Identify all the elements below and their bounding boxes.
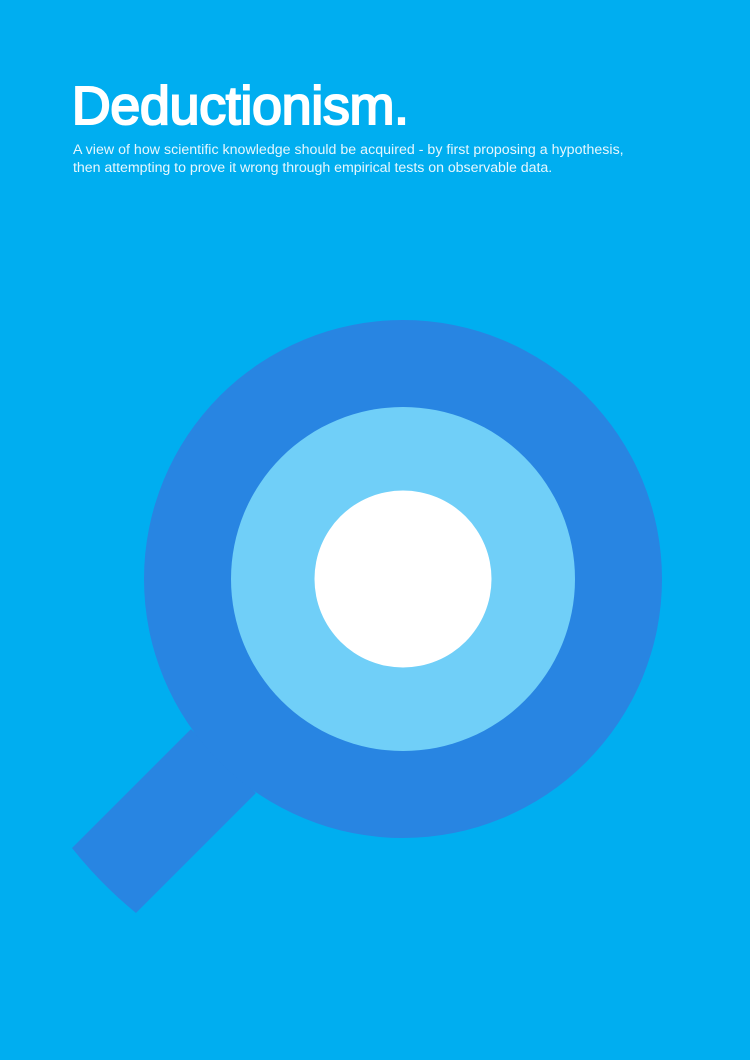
description text: then attempting to prove it wrong through empirical tests on observable data. [73,160,552,176]
magnifying glass outer ring [144,320,662,838]
lens light blue circle [231,407,575,751]
lens white centre circle [314,490,492,668]
title: Deductionism. [72,76,409,136]
description text [73,142,624,176]
magnifying glass handle [72,729,256,913]
description text: A view of how scientific knowledge should be acquired - by first proposing a hypothesis, [73,142,624,158]
